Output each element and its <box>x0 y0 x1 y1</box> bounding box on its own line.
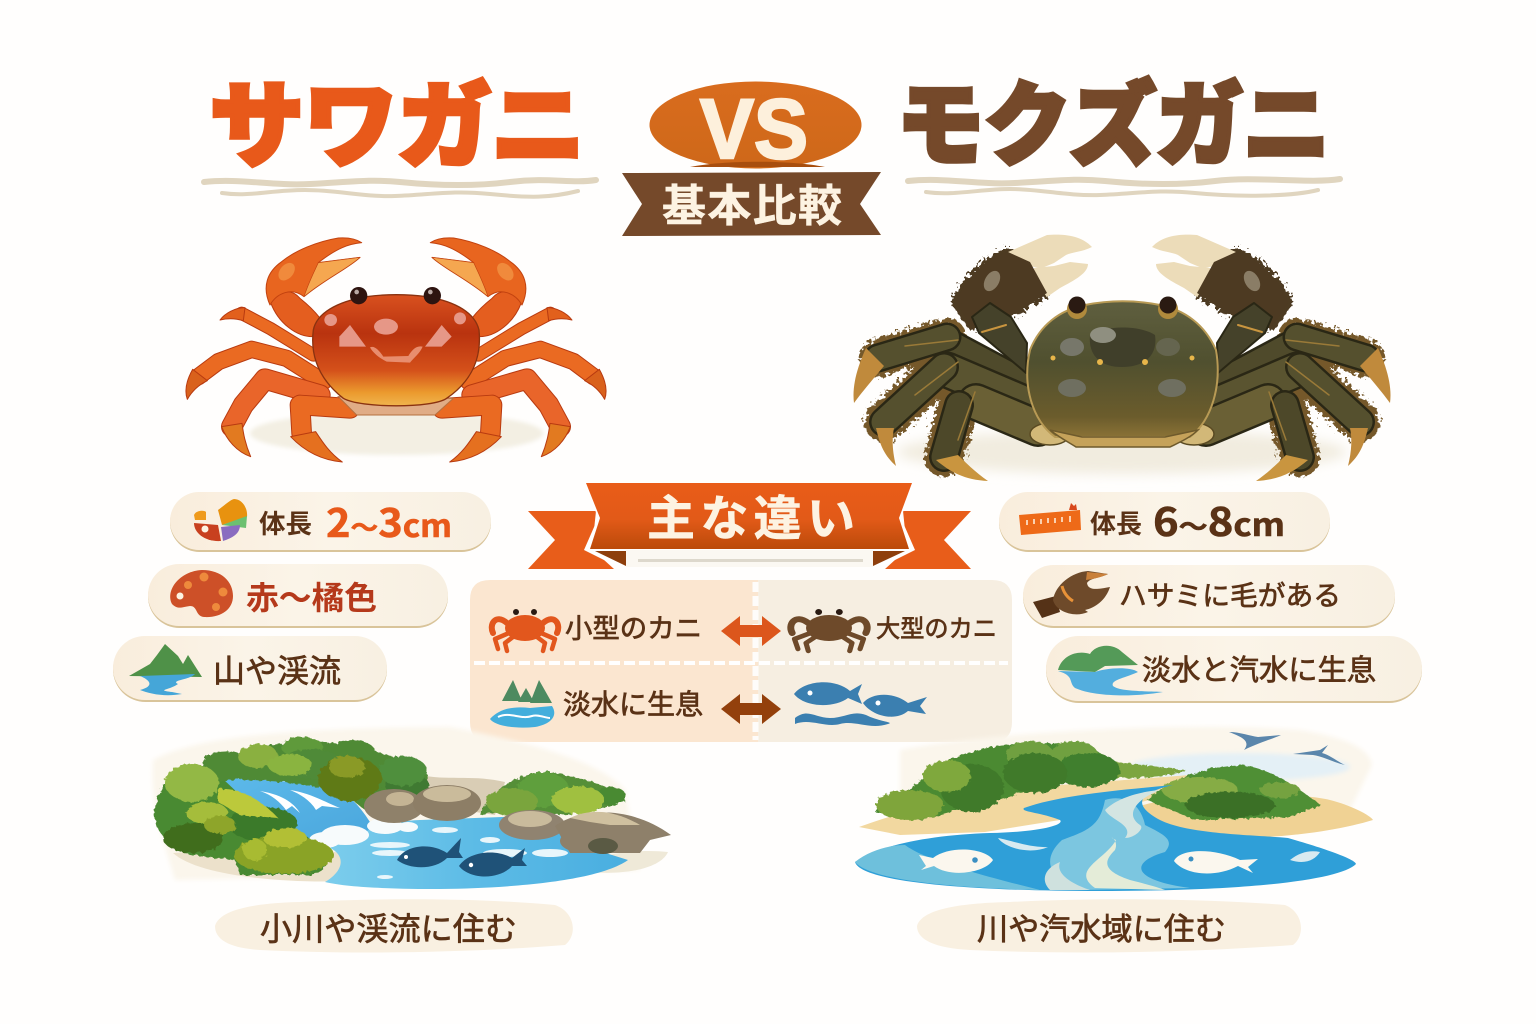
eyes <box>1067 296 1178 319</box>
ground shadow <box>897 430 1347 474</box>
pill: ハサミに毛がある <box>1023 565 1395 628</box>
label: 小川や渓流に住む <box>215 899 573 952</box>
water <box>855 785 1356 891</box>
ribbon: 基本比較 <box>622 170 881 236</box>
sky wash <box>900 727 1372 810</box>
ribbon: 基本比較: 基本比較 <box>662 170 842 234</box>
arrow: habitat <box>721 694 781 724</box>
icon: small red crab <box>492 609 558 651</box>
icon: ruler <box>1019 503 1081 535</box>
label: 川や汽水域に住む <box>917 899 1301 952</box>
pill: 赤〜橘色 <box>148 564 448 628</box>
bushes and hill <box>875 741 1321 820</box>
ribbon body <box>584 483 915 565</box>
shell highlights <box>324 312 466 363</box>
foam <box>309 818 418 848</box>
pill: 体長 6〜8cm: 6〜8cm <box>1153 492 1285 548</box>
icon: fish and waves <box>794 682 927 726</box>
icon: mountains and stream <box>129 644 202 695</box>
white strip <box>626 550 873 567</box>
title: サワガニ: サワガニ <box>210 51 585 186</box>
icon: hills and estuary <box>1058 646 1163 695</box>
pill: 山や渓流 <box>113 636 387 702</box>
banner: 主な違い <box>528 479 971 569</box>
scene: mountain stream <box>152 727 671 889</box>
pill: 体長 6〜8cm <box>999 492 1330 552</box>
pill: 体長 6〜8cm: 体長 <box>1090 509 1142 539</box>
sand bank <box>173 851 367 882</box>
fish <box>919 838 1320 873</box>
pill: 体長 2〜3cm: 2〜3cm <box>326 493 452 549</box>
folds <box>595 551 626 566</box>
banner: 主な違い: 主な違い <box>647 479 855 549</box>
crab illustration: サワガニ <box>186 238 606 462</box>
shell markings <box>1050 327 1194 397</box>
water streaks <box>370 827 568 879</box>
carapace <box>1027 301 1218 437</box>
legs and claws <box>854 235 1390 481</box>
scene: estuary <box>855 727 1373 891</box>
beige cliff <box>426 776 505 815</box>
pill: 体長 2〜3cm: 体長 <box>259 509 312 539</box>
title: モクズガニ: モクズガニ <box>897 52 1330 184</box>
carapace <box>313 295 479 406</box>
bushes <box>154 737 626 875</box>
icon: palette <box>170 570 233 617</box>
label: 小川や渓流に住む: 小川や渓流に住む <box>260 911 517 947</box>
icon: forest and lake <box>490 680 554 728</box>
legs and claws <box>186 238 606 462</box>
icon: colour chart <box>194 499 247 541</box>
under plate <box>338 397 453 415</box>
waterfall <box>222 778 373 845</box>
under plate <box>1050 430 1198 447</box>
crab illustration: モクズガニ <box>854 235 1390 481</box>
pill: 淡水と汽水に生息: 淡水と汽水に生息 <box>1142 654 1376 687</box>
text: 淡水に生息: 淡水に生息 <box>563 689 703 720</box>
sand left <box>859 775 1195 835</box>
shallows <box>855 845 1040 890</box>
label: 川や汽水域に住む: 川や汽水域に住む <box>977 912 1226 947</box>
panel: main differences <box>470 580 1012 742</box>
icon: small brown crab <box>791 609 867 651</box>
sand right <box>1135 795 1373 838</box>
ribbon tails <box>528 511 614 569</box>
rocks <box>364 785 671 854</box>
eyes <box>350 287 441 304</box>
pill: ハサミに毛がある: ハサミに毛がある <box>1119 580 1341 611</box>
pill: 体長 2〜3cm <box>170 492 491 552</box>
pill: 淡水と汽水に生息 <box>1046 636 1422 703</box>
pool <box>325 816 628 889</box>
pill: 山や渓流: 山や渓流 <box>213 653 341 689</box>
birds <box>1229 732 1345 765</box>
pill: 赤〜橘色: 赤〜橘色 <box>246 580 377 616</box>
VS badge: VS <box>700 82 808 176</box>
text: 小型のカニ: 小型のカニ <box>565 614 702 644</box>
icon: hairy claw <box>1033 571 1110 618</box>
arrow: size <box>721 616 781 646</box>
paper wash <box>152 727 640 880</box>
ground shadow <box>250 412 543 455</box>
text: 大型のカニ: 大型のカニ <box>876 615 997 643</box>
VS badge <box>650 82 862 176</box>
fish <box>397 838 527 876</box>
